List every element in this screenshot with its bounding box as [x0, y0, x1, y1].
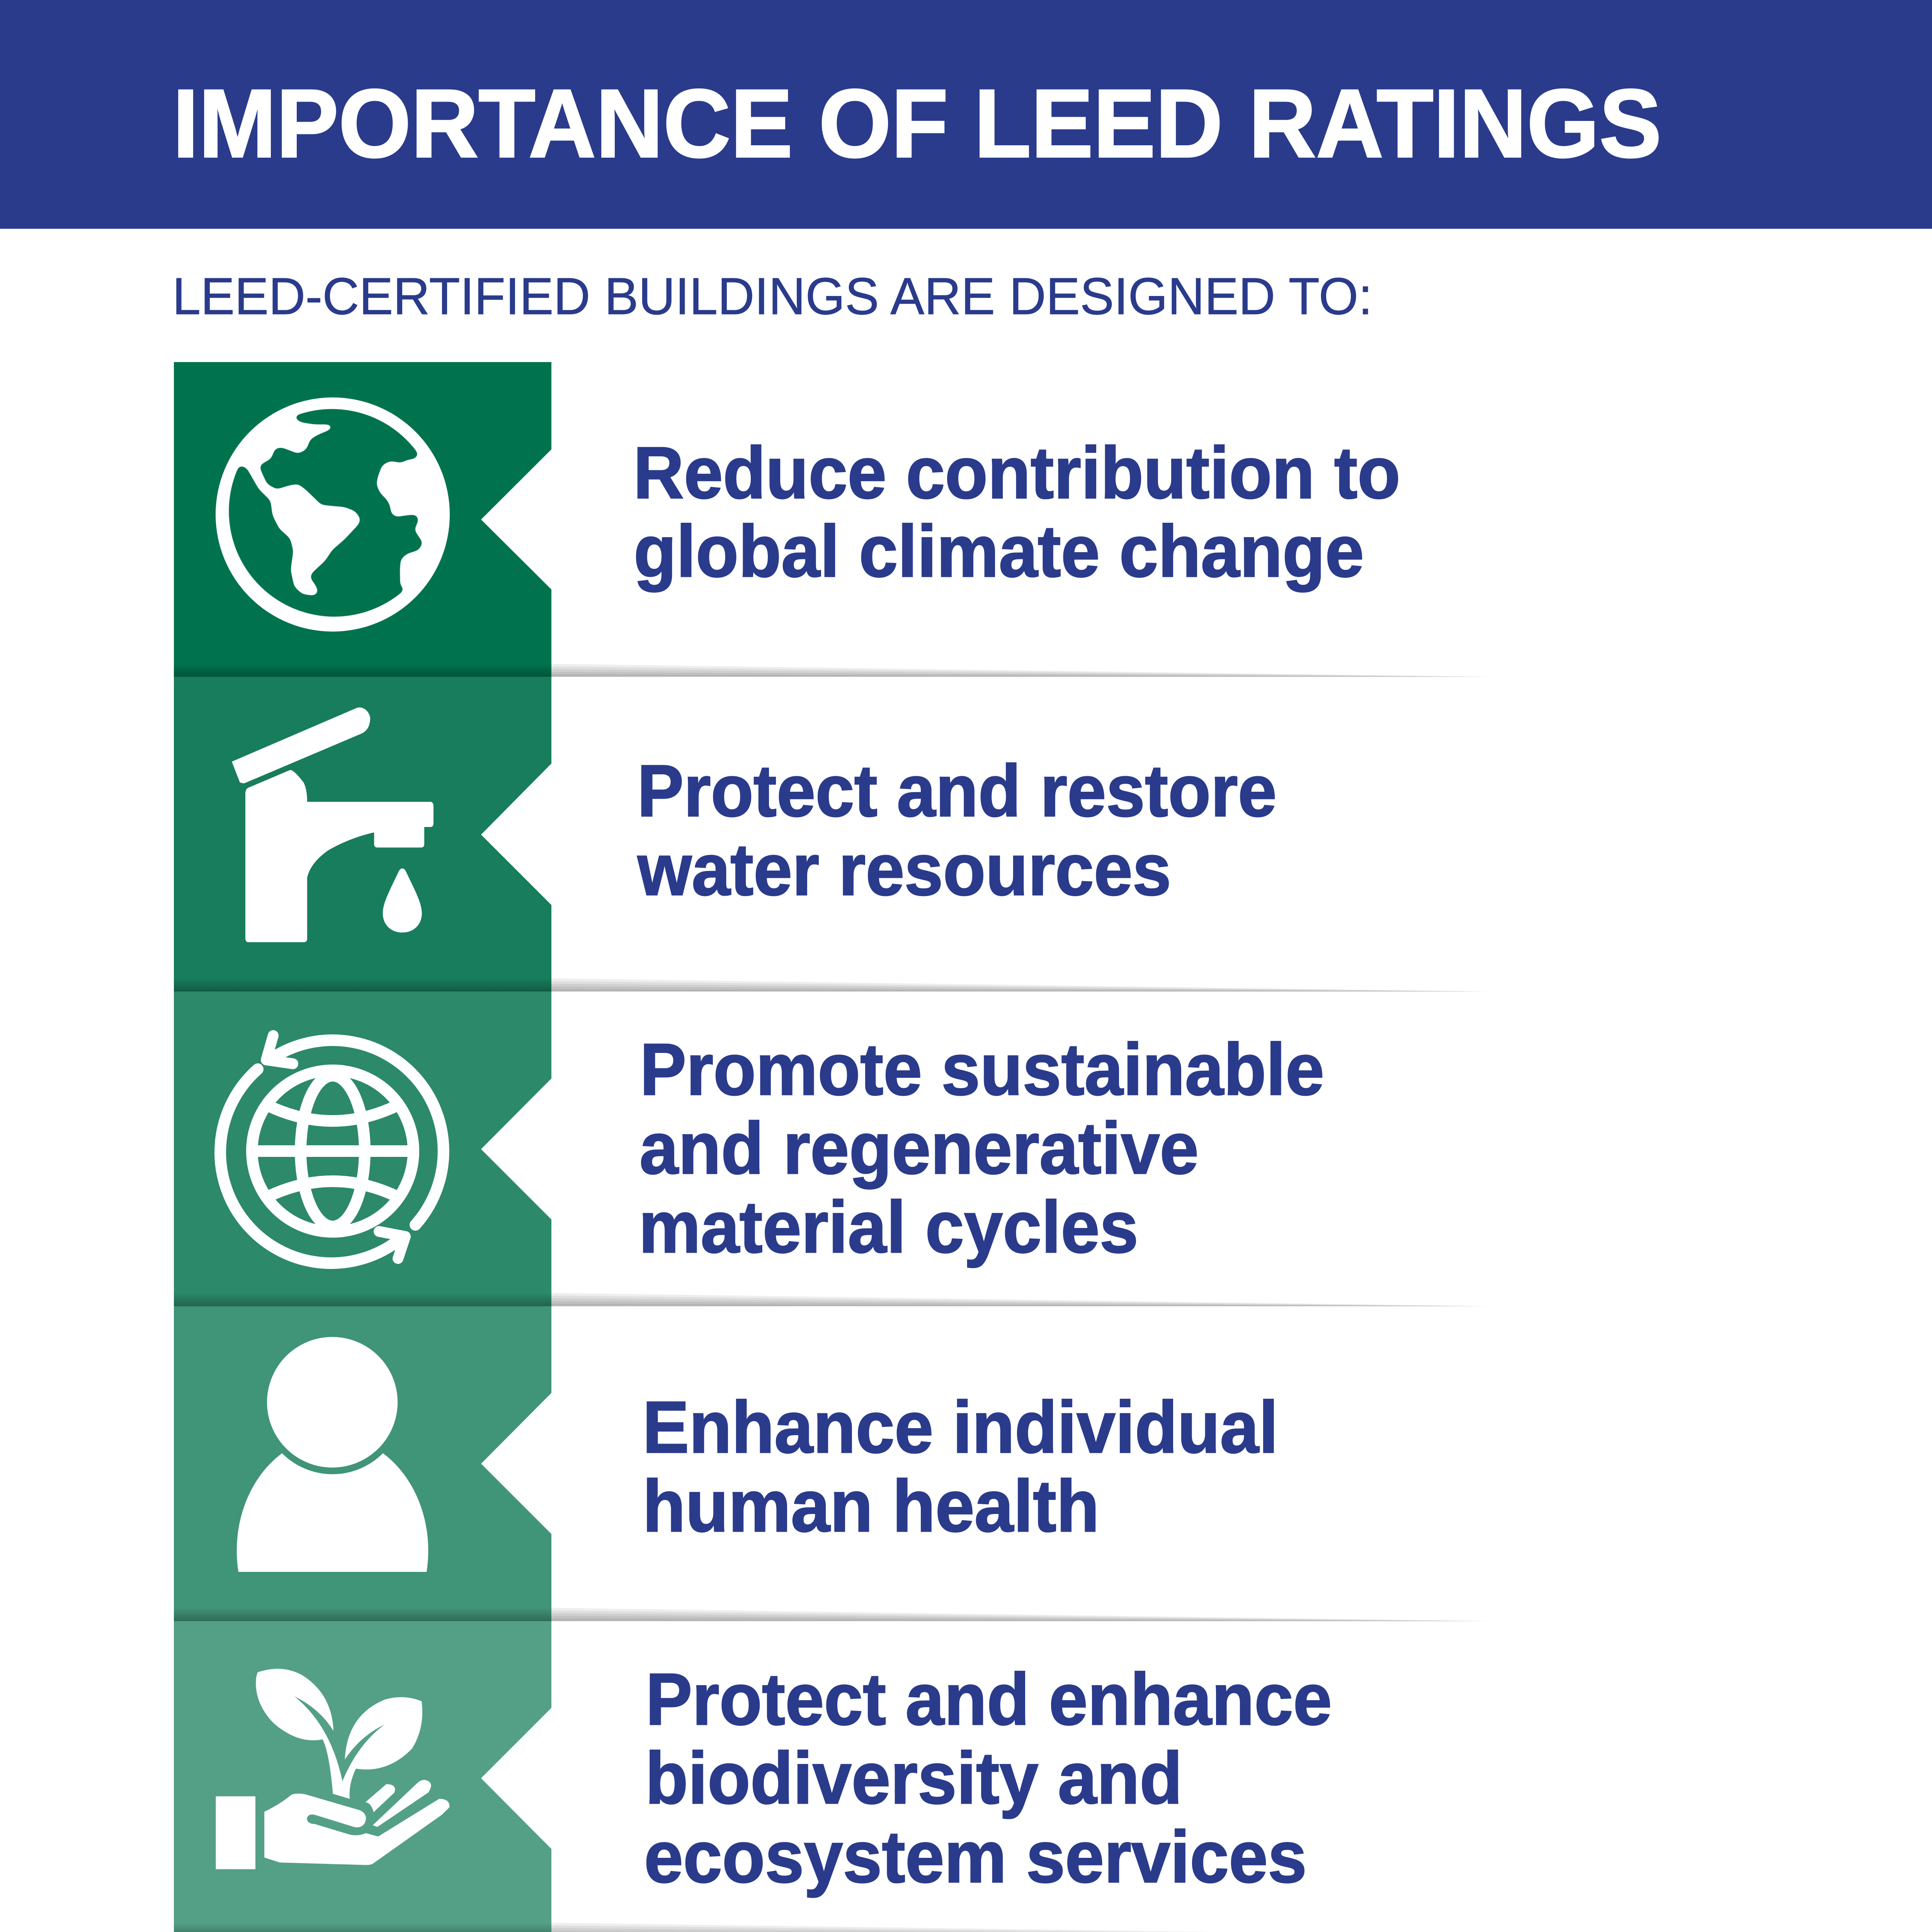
text: materials	[639, 1029, 1324, 1268]
divider shadow 5	[551, 1923, 1499, 1932]
text: biodiversity: biodiversity and	[645, 1737, 1182, 1819]
subtitle: LEED-CERTIFIED BUILDINGS ARE DESIGNED TO:	[172, 267, 1372, 325]
icon: person	[237, 1337, 428, 1572]
text: climate	[633, 432, 1400, 592]
icon: earth globe	[216, 397, 450, 631]
icon: seedling in hand	[216, 1669, 449, 1869]
header banner	[0, 0, 1932, 229]
panel: materials	[174, 992, 1324, 1306]
text: biodiversity: Protect and enhance	[646, 1658, 1332, 1740]
title: IMPORTANCE OF LEED RATINGS	[173, 70, 1662, 178]
icon: faucet with drop	[232, 707, 434, 942]
text: biodiversity	[644, 1658, 1332, 1898]
text: materials: and regenerative	[639, 1107, 1199, 1189]
panel: climate	[174, 362, 1400, 677]
panel: health	[174, 1306, 1278, 1621]
text: water	[637, 750, 1277, 911]
divider shadow 1	[551, 664, 1489, 677]
divider shadow 3	[551, 1293, 1489, 1306]
text: health: Enhance individual	[643, 1386, 1278, 1468]
divider shadow 4	[551, 1608, 1489, 1621]
text: biodiversity: ecosystem services	[644, 1816, 1307, 1898]
text: climate: global climate change	[634, 510, 1364, 592]
text: health	[643, 1386, 1278, 1547]
panel: water	[174, 677, 1277, 992]
text: climate: Reduce contribution to	[633, 432, 1400, 514]
text: health: human health	[643, 1465, 1099, 1547]
icon: globe with cycle arrows	[220, 1036, 444, 1263]
divider shadow 2	[551, 978, 1489, 992]
text: water: Protect and restore	[637, 750, 1277, 832]
text: water: water resources	[637, 829, 1171, 911]
text: materials: material cycles	[639, 1186, 1138, 1268]
panel: biodiversity	[174, 1621, 1332, 1932]
text: materials: Promote sustainable	[640, 1029, 1324, 1111]
